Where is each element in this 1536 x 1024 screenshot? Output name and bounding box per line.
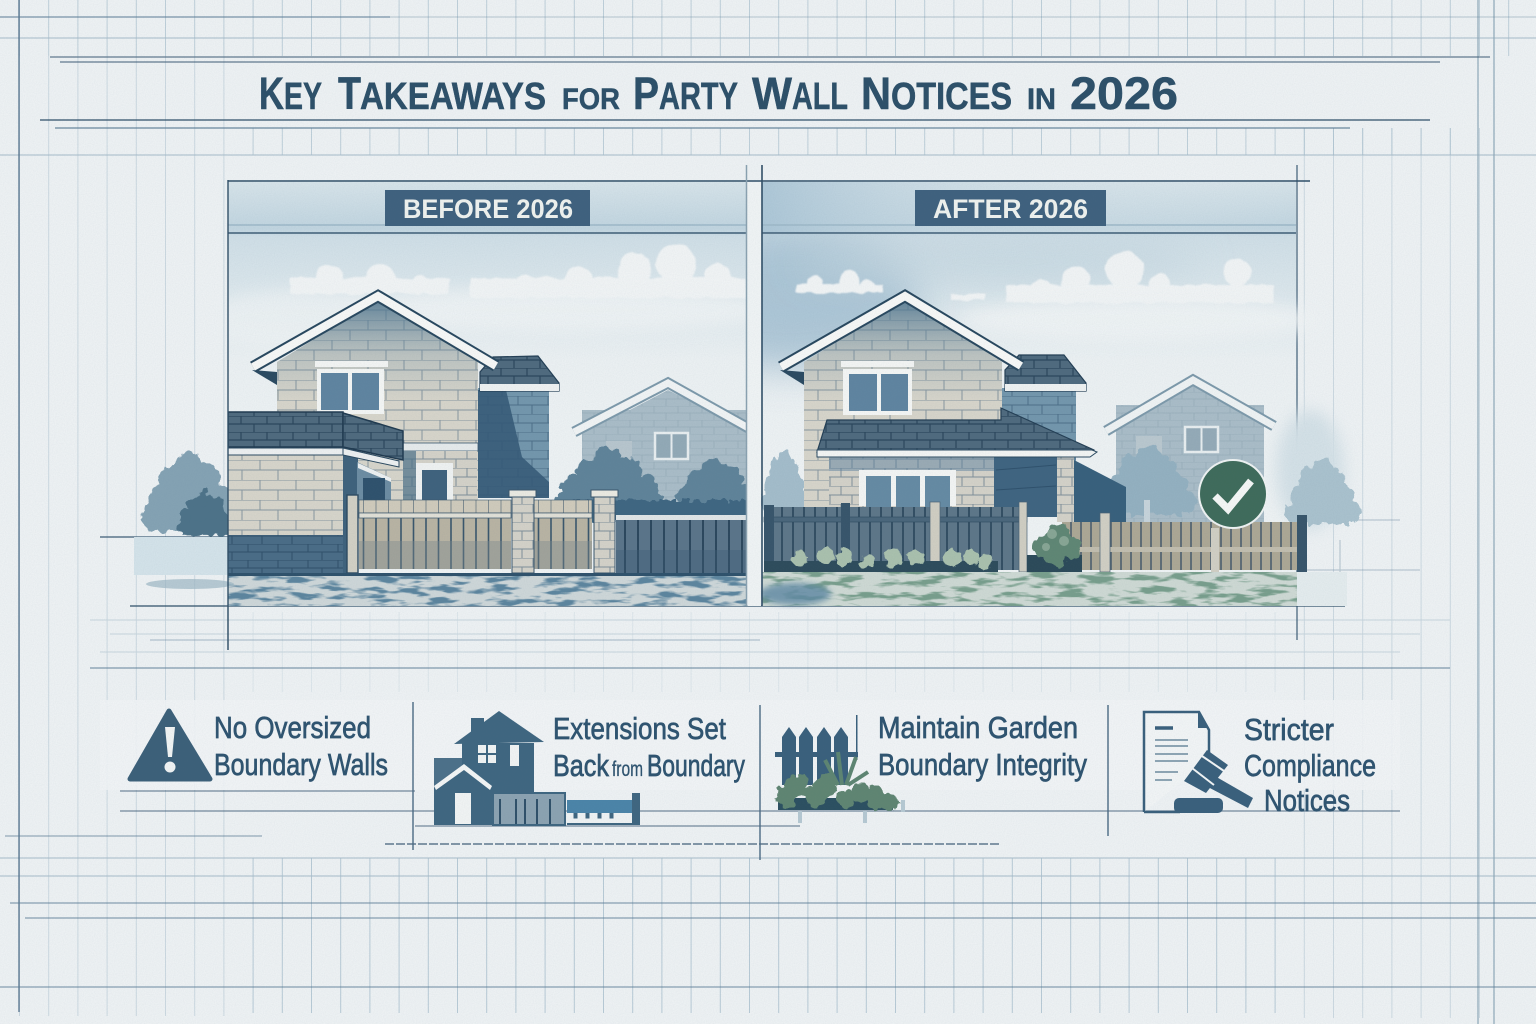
title: T [338, 68, 361, 119]
left bush outside frame [141, 451, 240, 535]
tan fence set back [1062, 513, 1307, 572]
ground right [759, 572, 1347, 606]
label: Maintain Garden [878, 710, 1078, 745]
panel: before 2026 scene [134, 182, 780, 606]
frame lines and centre divider [228, 165, 762, 650]
label: No Oversized [214, 710, 371, 745]
icon: warning triangle [130, 711, 210, 779]
outside bushes and haze [760, 410, 1360, 530]
title: N [861, 68, 891, 119]
label [1244, 712, 1376, 818]
background bushes [554, 448, 761, 522]
label [553, 711, 745, 783]
title: AKEAWAYS [360, 76, 546, 118]
title: IN [1027, 83, 1056, 116]
panel: after 2026 scene [761, 182, 1362, 609]
title: 2026 [1070, 68, 1178, 119]
takeaway 1: no oversized boundary walls [130, 710, 388, 782]
takeaway 4: stricter compliance notices [1144, 712, 1376, 818]
badge: after 2026: AFTER 2026 [933, 194, 1088, 224]
door and ledge [403, 443, 478, 501]
label: Back [553, 748, 609, 783]
main house side wing [477, 356, 559, 498]
label: Boundary [647, 748, 745, 783]
extension with roof set back [817, 408, 1097, 522]
main house side wing [1001, 355, 1126, 522]
title: OTICES [891, 76, 1012, 118]
icon: fence and shrub [775, 715, 903, 823]
takeaway 3: garden boundary integrity [775, 710, 1087, 823]
title: ARTY [659, 76, 738, 118]
main house wall and gable [780, 296, 1021, 507]
sky [228, 182, 746, 576]
title: FOR [562, 83, 620, 116]
dark neighbour fence [616, 515, 748, 573]
title: ALL [792, 76, 848, 118]
title [259, 68, 1178, 119]
label: from [612, 758, 643, 781]
takeaway 2: extensions set back [434, 711, 745, 825]
ground left [134, 537, 746, 606]
sky [762, 182, 1305, 394]
label: Extensions Set [553, 711, 726, 746]
label: Boundary Walls [214, 747, 388, 782]
shrubs and flowers [764, 523, 1082, 573]
title: EY [284, 76, 322, 118]
badge: before 2026: BEFORE 2026 [403, 194, 573, 224]
title: K [259, 68, 284, 119]
title: P [633, 68, 659, 119]
label: Boundary Integrity [878, 747, 1087, 782]
main house wall and gable [252, 296, 496, 500]
icon: house with set-back extension [434, 711, 640, 825]
background house [574, 383, 752, 522]
label: Stricter [1244, 712, 1334, 747]
title: W [752, 68, 792, 119]
label [214, 710, 388, 782]
label: Compliance [1244, 748, 1376, 783]
tan fence with pillars [347, 490, 618, 573]
takeaway dividers [413, 702, 1108, 860]
badge: after 2026 [915, 190, 1106, 226]
background tree [1101, 445, 1196, 522]
dark garden fence [764, 502, 1027, 572]
extension block [228, 412, 403, 575]
icon: document and gavel [1144, 712, 1253, 813]
label: Notices [1264, 783, 1350, 818]
label [878, 710, 1087, 782]
icon: green check badge [1198, 459, 1268, 529]
background house [1106, 380, 1274, 523]
